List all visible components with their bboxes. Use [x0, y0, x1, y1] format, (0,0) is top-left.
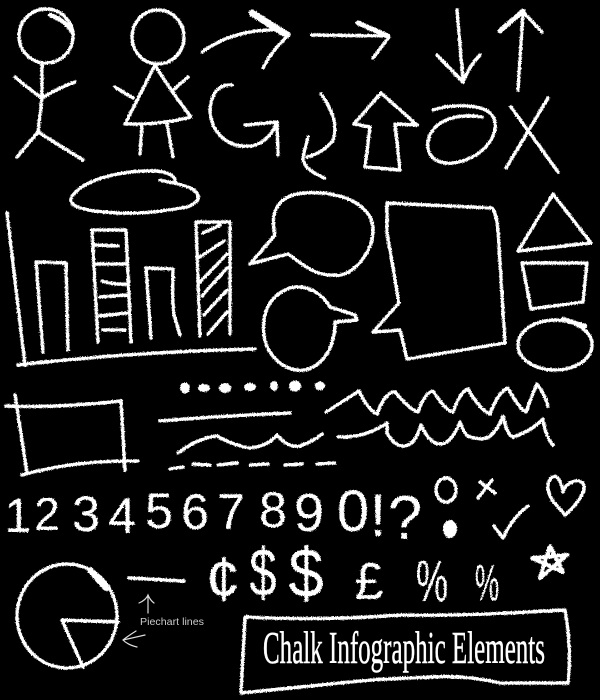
- icon: straight right arrow: [312, 23, 389, 58]
- currency and percent symbols: ¢: [206, 545, 240, 614]
- icon: circle scribble: [428, 106, 495, 163]
- icon: curved arrow: [202, 13, 287, 68]
- zigzag line divider: [326, 384, 548, 414]
- currency and percent symbols: %: [475, 554, 499, 611]
- icon: G-shaped arrow: [210, 85, 278, 155]
- icon: down arrow: [437, 10, 480, 82]
- numerals row: [5, 479, 422, 553]
- numerals row: 8: [259, 482, 287, 538]
- shape: triangle: [518, 194, 591, 251]
- currency and percent symbols: %: [416, 549, 448, 614]
- icon: small cross: [478, 480, 495, 498]
- label: Piechart lines: Piechart lines: [140, 616, 204, 628]
- wavy line divider: [178, 434, 322, 453]
- icon: block up arrow: [354, 93, 417, 170]
- numerals row: 6: [181, 484, 209, 540]
- frame: rectangle: [6, 395, 138, 475]
- title frame: [241, 610, 569, 693]
- icon: J-shaped arrow: [303, 94, 335, 178]
- numerals row: 4: [108, 488, 136, 544]
- pie chart line sample: [129, 578, 184, 581]
- icon: check mark: [494, 506, 528, 538]
- row of dots: [180, 380, 325, 394]
- small circle symbol: [436, 478, 456, 502]
- shape: ellipse: [518, 319, 592, 370]
- currency and percent symbols: $: [249, 534, 277, 611]
- icon: star: [532, 546, 567, 578]
- icon: X mark: [506, 98, 558, 172]
- numerals row: 0: [337, 479, 369, 544]
- scalloped line divider: [338, 416, 553, 446]
- callout ellipse: [71, 171, 198, 213]
- numerals row: 2: [34, 488, 60, 540]
- icon: heart: [548, 477, 584, 515]
- stick man: [15, 9, 83, 160]
- numerals row: 7: [217, 484, 245, 540]
- currency and percent symbols: $: [288, 535, 324, 613]
- bar chart: [7, 213, 255, 365]
- pie chart: [17, 564, 118, 668]
- numerals row: 5: [145, 483, 173, 539]
- icon: up arrow: [500, 11, 542, 90]
- numerals row: 9: [294, 483, 324, 543]
- numerals row: 3: [72, 486, 100, 542]
- speech bubble: circle pointing right: [263, 287, 357, 370]
- stick woman: [115, 10, 191, 157]
- speech bubble: rounded pointing left: [250, 193, 373, 275]
- numerals row: ?: [388, 484, 422, 553]
- numerals row: 1: [5, 490, 31, 543]
- dashed line divider: [170, 463, 335, 469]
- large chalk dot: [443, 520, 457, 538]
- currency and percent symbols: £: [355, 553, 384, 611]
- arrow pointing left to pie chart: [123, 631, 145, 647]
- numerals row: !: [370, 482, 386, 549]
- straight line divider: [160, 413, 290, 421]
- shape: trapezoid: [522, 263, 587, 309]
- speech bubble: large square: [373, 203, 505, 359]
- arrow pointing up to line sample: [139, 595, 154, 613]
- currency and percent symbols: [206, 534, 499, 614]
